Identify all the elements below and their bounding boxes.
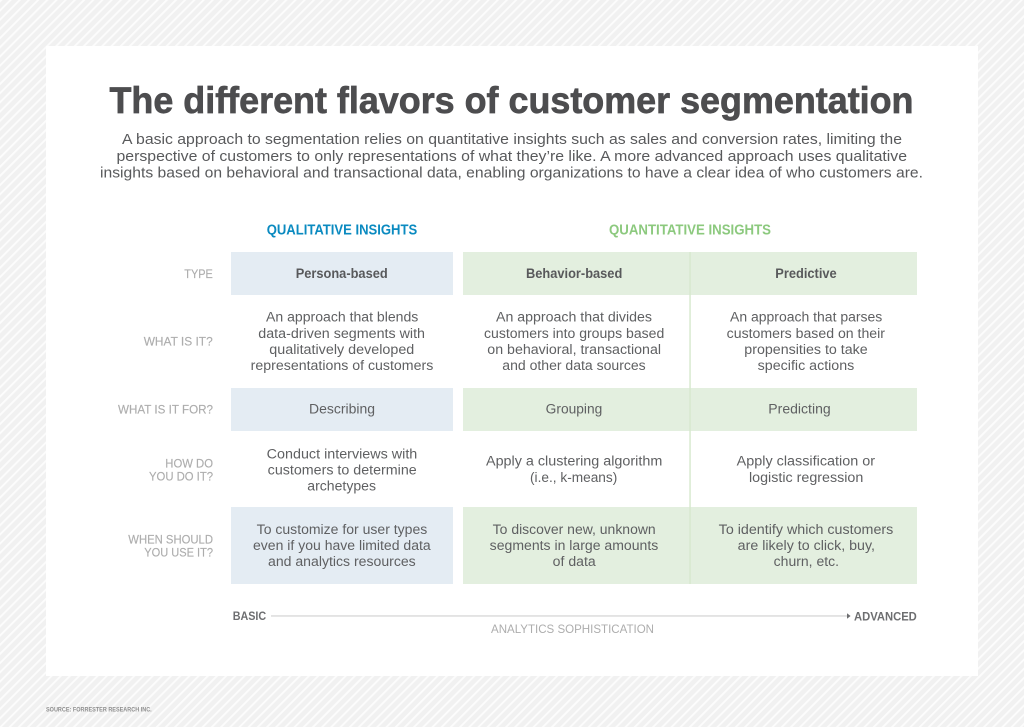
column: persona-based: and analytics resources [268, 554, 416, 569]
intro paragraph: A basic approach to segmentation relies on quantitative insights such as sales and conversion rates, limiting the [122, 131, 902, 148]
column: behavior-based: To discover new, unknown [493, 522, 656, 537]
row labels: WHEN SHOULD [128, 533, 213, 547]
column: persona-based: An approach that blends [266, 310, 419, 325]
column: behavior-based: Grouping [546, 402, 602, 417]
axis title: ANALYTICS SOPHISTICATION [491, 622, 654, 636]
white card [46, 46, 978, 676]
column: persona-based: even if you have limited data [253, 538, 431, 553]
title: The different flavors of customer segmentation [110, 79, 914, 121]
intro paragraph [100, 131, 923, 182]
column: predictive: propensities to take [744, 342, 868, 357]
column: predictive: Predicting [768, 402, 831, 417]
column: persona-based: qualitatively developed [269, 342, 414, 357]
column: predictive: An approach that parses [730, 310, 883, 325]
table backgrounds [231, 252, 917, 584]
column: persona-based: Conduct interviews with [267, 446, 417, 461]
column: persona-based: representations of customers [251, 358, 434, 373]
row labels: YOU DO IT? [149, 470, 213, 484]
column: predictive: churn, etc. [774, 554, 839, 569]
axis arrow: basic to advanced [271, 613, 851, 619]
column: behavior-based: of data [553, 554, 596, 569]
column: predictive: To identify which customers [719, 522, 894, 537]
row labels: YOU USE IT? [144, 546, 213, 560]
intro paragraph: perspective of customers to only representations of what they’re like. A more advanced approach uses qualitative [116, 148, 907, 165]
column: behavior-based: segments in large amounts [490, 538, 659, 553]
axis label: advanced: ADVANCED [854, 610, 917, 624]
column: persona-based: archetypes [307, 478, 376, 494]
column: predictive [719, 266, 894, 569]
row labels: TYPE [184, 267, 213, 281]
column: predictive: Apply classification or [737, 454, 876, 469]
row labels: HOW DO [165, 457, 213, 471]
source note: SOURCE: FORRESTER RESEARCH INC. [46, 708, 152, 714]
column: persona-based: Persona-based [296, 266, 388, 281]
column: predictive: Predictive [775, 266, 837, 281]
column: behavior-based: on behavioral, transactional [487, 342, 661, 357]
row labels [118, 267, 213, 560]
column: persona-based: customers to determine [268, 462, 417, 478]
column: behavior-based: and other data sources [502, 358, 646, 373]
column: behavior-based: An approach that divides [496, 310, 652, 325]
heading: qualitative insights: QUALITATIVE INSIGHTS [267, 222, 417, 238]
row labels: WHAT IS IT? [144, 334, 213, 348]
column: predictive: customers based on their [727, 326, 886, 341]
column: behavior-based: customers into groups based [484, 326, 664, 341]
column: behavior-based: Behavior-based [526, 266, 622, 281]
intro paragraph: insights based on behavioral and transactional data, enabling organizations to have a clear idea of who customers are. [100, 164, 923, 182]
axis label: basic: BASIC [233, 609, 266, 623]
column: persona-based: To customize for user types [257, 522, 428, 537]
column: persona-based [251, 266, 434, 569]
column: predictive: specific actions [758, 358, 855, 373]
column: behavior-based: (i.e., k-means) [530, 470, 617, 485]
column: predictive: are likely to click, buy, [738, 538, 875, 553]
row labels: WHAT IS IT FOR? [118, 402, 213, 416]
column: predictive: logistic regression [749, 470, 863, 485]
column: persona-based: Describing [309, 402, 375, 417]
column: persona-based: data-driven segments with [258, 326, 425, 341]
column: behavior-based: Apply a clustering algorithm [486, 454, 662, 469]
heading: quantitative insights: QUANTITATIVE INSIGHTS [609, 222, 771, 238]
column: behavior-based [484, 266, 664, 569]
